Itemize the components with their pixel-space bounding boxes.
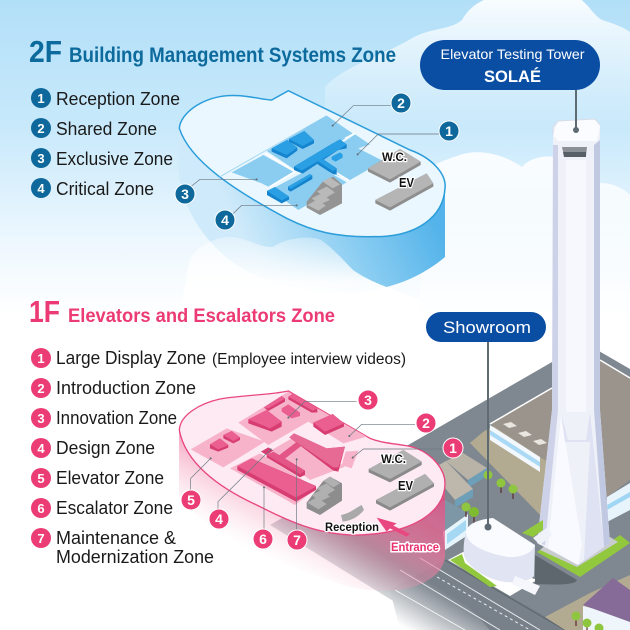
legend: 1F zones: 5 [37,471,45,486]
entrance arrow [377,518,410,537]
reception desk [341,505,364,522]
2F zone 2 counters [267,131,347,203]
road [390,558,570,630]
2F floor plate [179,91,445,237]
1F floor badges: 3 [364,392,372,408]
legend: 2F zones: 3 [37,151,45,166]
legend: 1F zones: 1 [37,351,45,366]
WC label 2F: W.C. [382,150,407,164]
legend: 2F zones: Exclusive Zone [56,149,173,169]
1F stairs [307,477,342,515]
2F floor badges: 4 [221,212,229,228]
legend: 2F zones: 4 [37,181,45,196]
2F floor badges: 1 [445,123,453,139]
legend: 2F zones [31,88,180,199]
panel: 1F floor [179,390,463,591]
1F floor badges: 2 [422,415,430,431]
legend: 1F zones: Escalator Zone [56,498,173,518]
1F floor badges [181,390,463,550]
showroom building [448,518,577,596]
2F floor badges [175,93,459,230]
ground and city [270,343,630,630]
legend: 2F zones: 2 [37,121,45,136]
tower green base [537,535,630,577]
legend: 1F zones: 6 [37,501,45,516]
legend: 1F zones: Maintenance & [56,528,176,548]
callout: Showroom: Showroom [443,318,531,337]
tan plot around hall [470,365,630,520]
1F leaders [191,401,443,530]
1F floor badges: 6 [259,531,267,547]
2F floor wall [179,127,445,293]
legend: 1F zones [31,348,406,567]
ground fade [250,500,490,630]
heading: 2F: Building Management Systems Zone [69,44,396,67]
1F EV block [376,474,434,511]
legend: 1F zones: 2 [37,381,45,396]
1F floor badges: 4 [215,511,223,527]
legend: 1F zones: Design Zone [56,438,155,458]
legend: 1F zones: 4 [37,441,45,456]
1F W.C. block [369,450,422,482]
2F leaders [187,106,440,217]
heading: 1F [29,294,335,329]
legend: 1F zones: Innovation Zone [56,408,177,428]
1F floor badges: 5 [187,492,195,508]
building: left annex behind zone [420,453,487,550]
Entrance label: Entrance [391,540,439,554]
1F floor plate [179,391,445,535]
legend: 2F zones: Shared Zone [56,119,157,139]
legend: 1F zones: Large Display Zone [56,348,206,368]
legend: 1F zones: (Employee interview videos) [212,351,406,368]
1F zones [191,392,367,505]
heading: 2F: 2F [29,34,62,69]
callout: Showroom [426,312,546,530]
building: back hall [490,360,630,522]
tower SOLAÉ [537,119,630,577]
2F stairs [307,177,342,215]
callout: Elevator Testing Tower: Elevator Testing Tower [440,46,585,62]
Reception label: Reception [325,520,379,534]
callout: Elevator Testing Tower: SOLAÉ [484,67,541,86]
2F EV block [375,173,433,211]
legend: 2F zones: Reception Zone [56,89,180,109]
heading: 1F: 1F [29,294,60,329]
legend: 1F zones: Introduction Zone [56,378,196,398]
heading: 1F: Elevators and Escalators Zone [68,306,335,327]
clouds [325,0,630,300]
1F floor badges: 7 [293,532,301,548]
1F floor wall [179,430,445,591]
WC label 1F: W.C. [381,452,406,466]
2F zones [232,116,383,210]
2F cloud overlay [180,237,420,312]
legend: 1F zones: 3 [37,411,45,426]
2F floor badges: 2 [397,95,405,111]
EV label 2F: EV [399,175,414,190]
purple building [545,575,630,630]
callout: Elevator Testing Tower [420,40,600,133]
legend: 2F zones: Critical Zone [56,179,154,199]
2F floor badges: 3 [181,186,189,202]
trees [462,470,604,630]
legend: 2F zones: 1 [37,91,45,106]
1F exhibits [210,393,345,502]
legend: 1F zones: Modernization Zone [56,547,214,567]
EV label 1F: EV [398,478,413,493]
2F W.C. block [368,149,421,183]
1F floor badges: 1 [449,440,457,456]
panel: 2F floor [175,91,459,312]
legend: 1F zones: Elevator Zone [56,468,164,488]
heading: 2F [29,34,396,69]
legend: 1F zones: 7 [37,531,45,546]
